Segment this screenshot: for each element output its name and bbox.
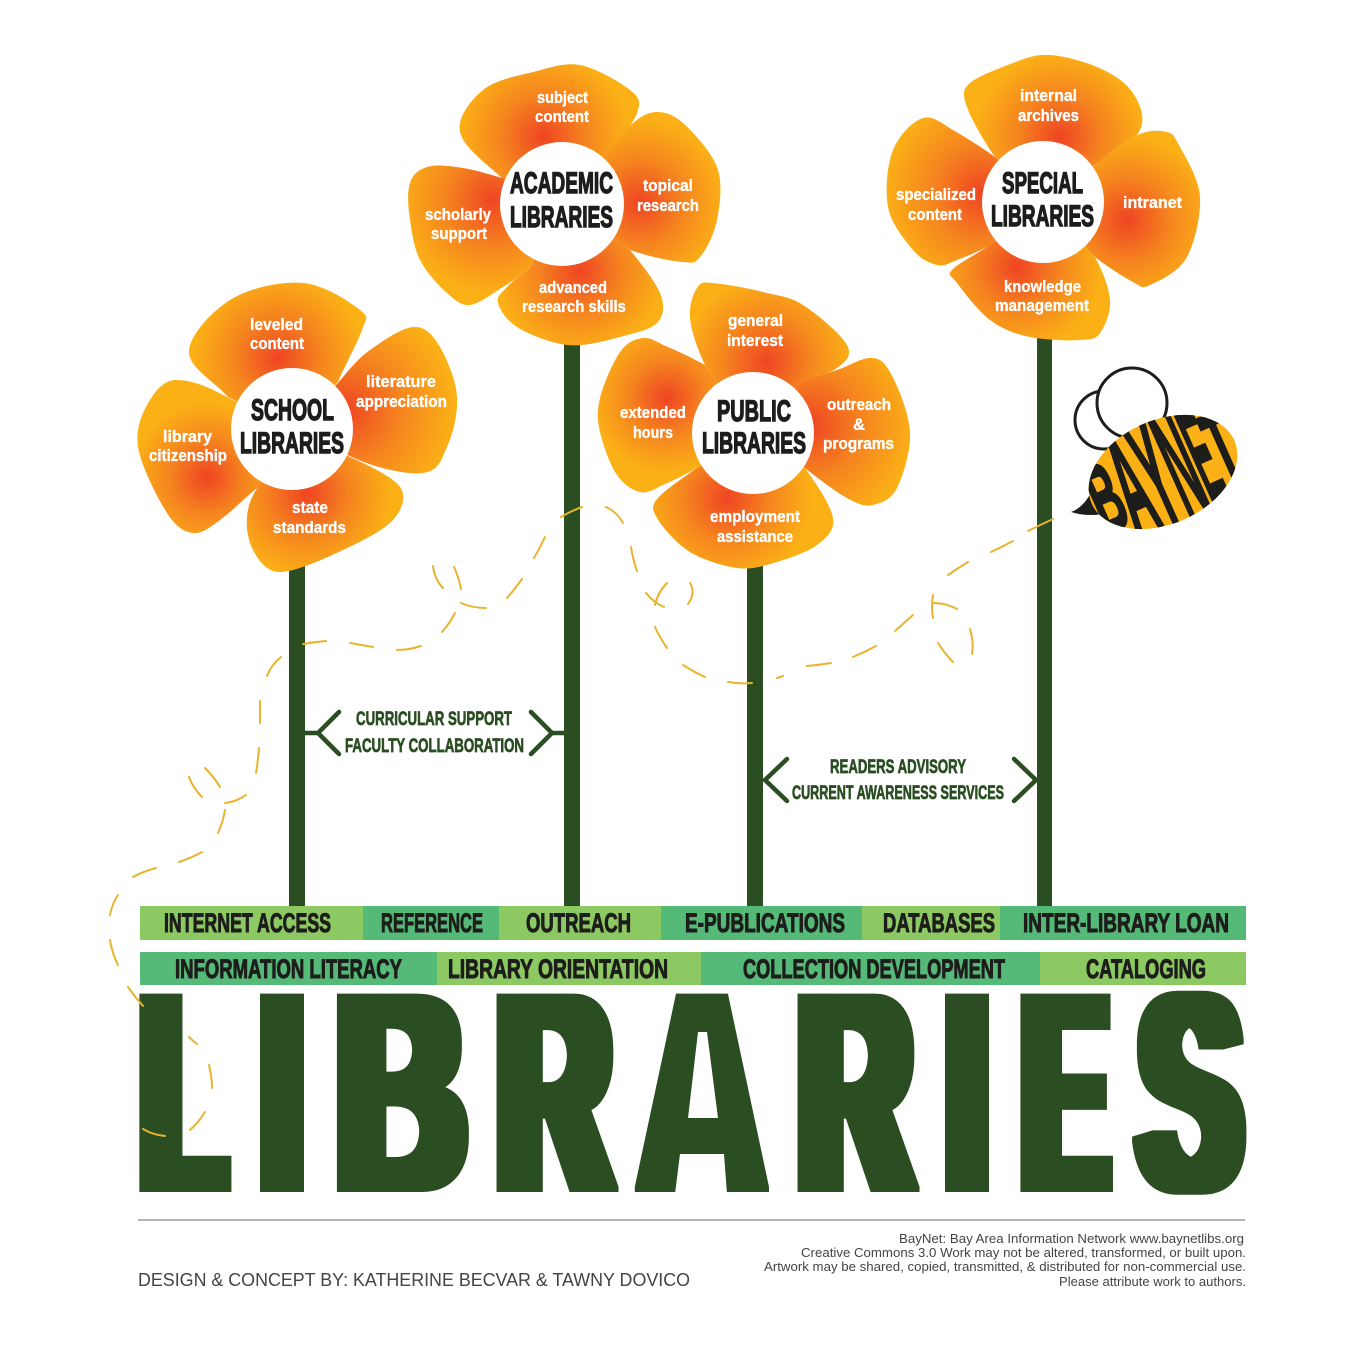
petal: literature appreciation: literature [366,372,436,391]
licence text: BayNet: Bay Area Information Network www.baynetlibs.org [899,1232,1244,1246]
center: academic libraries [500,142,624,266]
title: LIBRARIES: A [643,936,761,1249]
arrow: curricular support right [531,712,564,754]
center: special libraries: LIBRARIES [991,200,1094,233]
licence text: Please attribute work to authors. [1059,1275,1246,1289]
petal: topical research [562,112,720,263]
petal: internal archives [964,55,1142,202]
text: readers advisory [792,756,1004,804]
service bar: second row: INFORMATION LITERACY [175,954,402,984]
footer rule [138,1219,1245,1221]
petal: extended hours: extended [620,403,686,422]
bee body with BAYNET lettering: E [1161,382,1242,528]
bee body with BAYNET lettering: N [1131,379,1228,551]
petal: library citizenship: library [163,427,213,446]
petal: knowledge management [950,202,1110,340]
text: readers advisory: CURRENT AWARENESS SERVICES [792,782,1004,804]
petal: general interest: interest [727,331,783,350]
dashed bee flight path [110,507,1053,1136]
title: LIBRARIES: L [142,935,224,1250]
title: LIBRARIES: S [1140,935,1240,1249]
arrow: readers advisory left [765,759,787,801]
service bar: first row: INTERNET ACCESS [164,908,331,938]
petal: subject content: subject [537,88,588,107]
petal: scholarly support [408,165,562,305]
flower: academic libraries [408,64,720,345]
service bar: second row: CATALOGING [1086,954,1206,984]
petal: employment assistance: employment [710,507,800,526]
petal: leveled content: content [250,334,304,353]
petal: internal archives: archives [1018,106,1079,125]
petal: general interest [690,283,849,433]
center: academic libraries: ACADEMIC [510,167,613,200]
petal: state standards: state [292,498,328,517]
petal: intranet [1043,131,1200,287]
petal: leveled content: leveled [250,315,303,334]
text: curricular support: CURRICULAR SUPPORT [356,708,512,730]
petal: leveled content [189,283,366,429]
petal: state standards [247,429,403,572]
petal: advanced research skills: advanced [539,278,607,297]
petal: topical research: topical [643,176,693,195]
licence text: Creative Commons 3.0 Work may not be altered, transformed, or built upon. [801,1246,1246,1260]
petal: scholarly support: scholarly [425,205,491,224]
arrow: curricular support left [305,712,339,754]
licence text [764,1232,1246,1289]
petal: internal archives: internal [1020,86,1077,105]
service bar: second row [140,952,1246,985]
petal: state standards: standards [273,518,346,537]
petal: extended hours [598,338,753,492]
title: LIBRARIES: I [948,935,986,1249]
title: LIBRARIES: R [799,937,911,1250]
text: curricular support: FACULTY COLLABORATION [345,735,524,757]
petal: advanced research skills [498,204,663,345]
service bar: second row: LIBRARY ORIENTATION [448,954,668,984]
bee stinger [1071,478,1112,515]
petal: topical research: research [637,196,699,215]
crossbar of the title letter A [678,1116,726,1156]
text: readers advisory: READERS ADVISORY [830,756,966,778]
petal: library citizenship [137,380,292,533]
bee body with BAYNET lettering [1088,414,1238,530]
service bar: first row: E-PUBLICATIONS [685,908,845,938]
center: school libraries: SCHOOL [251,394,334,427]
petal: general interest: general [728,311,783,330]
title: LIBRARIES [142,935,1240,1250]
service bar: first row: REFERENCE [381,908,483,938]
licence text: Artwork may be shared, copied, transmitted, & distributed for non-commercial use. [764,1260,1246,1274]
title: LIBRARIES: E [1024,935,1106,1249]
center: special libraries: SPECIAL [1002,167,1083,200]
petal: subject content [460,64,639,204]
stem: school [289,560,305,908]
petal: employment assistance: assistance [717,527,793,546]
petal: outreach and programs [753,358,910,506]
bee wings [1075,368,1167,449]
bee body with BAYNET lettering: Y [1107,391,1203,562]
bee body with BAYNET lettering: B [1069,442,1142,555]
service bar: first row: DATABASES [883,908,995,938]
flower: school libraries [137,283,457,572]
petal: specialized content: content [908,205,962,224]
title: LIBRARIES: R [498,937,610,1250]
service bar: first row: OUTREACH [526,908,631,938]
center: school libraries [231,368,353,490]
center: school libraries: LIBRARIES [240,427,344,460]
service bar: first row: INTER-LIBRARY LOAN [1023,908,1229,938]
petal: library citizenship: citizenship [149,446,227,465]
center: public libraries: LIBRARIES [702,427,806,460]
center: special libraries [982,141,1104,263]
title: LIBRARIES: I [263,935,301,1249]
center: public libraries: PUBLIC [717,395,791,428]
flower: special libraries [887,55,1200,340]
petal: specialized content [887,117,1043,266]
petal: outreach and programs: outreach [827,395,891,414]
stem: public [747,560,763,908]
service bar: second row: COLLECTION DEVELOPMENT [743,954,1005,984]
petal: specialized content: specialized [896,185,976,204]
petal: advanced research skills: research skills [522,297,626,316]
petal: extended hours: hours [633,423,673,442]
bee body with BAYNET lettering: T [1187,391,1256,502]
petal: subject content: content [535,107,589,126]
service bar: first row [140,906,1246,940]
petal: outreach and programs: & [853,415,865,434]
arrow: readers advisory right [1014,759,1036,801]
text: curricular support [345,708,524,757]
petal: employment assistance [653,433,833,569]
center: public libraries [692,372,814,494]
petal: intranet: intranet [1123,193,1182,212]
stem: special [1037,325,1052,908]
stem: academic [564,335,580,908]
flower: public libraries [598,283,910,569]
petal: knowledge management: management [995,296,1089,315]
bee body with BAYNET lettering: A [1085,408,1177,563]
title: LIBRARIES: B [337,935,465,1249]
petal: knowledge management: knowledge [1004,277,1081,296]
center: academic libraries: LIBRARIES [510,201,613,234]
icon: BayNet bee [1071,366,1238,530]
counter and leg opening of the title letter A [675,1032,727,1194]
credit: design and concept: DESIGN & CONCEPT BY: KATHERINE BECVAR & TAWNY DOVICO [138,1270,690,1290]
petal: literature appreciation [292,327,457,473]
petal: literature appreciation: appreciation [356,392,447,411]
petal: outreach and programs: programs [823,434,894,453]
petal: scholarly support: support [431,224,487,243]
